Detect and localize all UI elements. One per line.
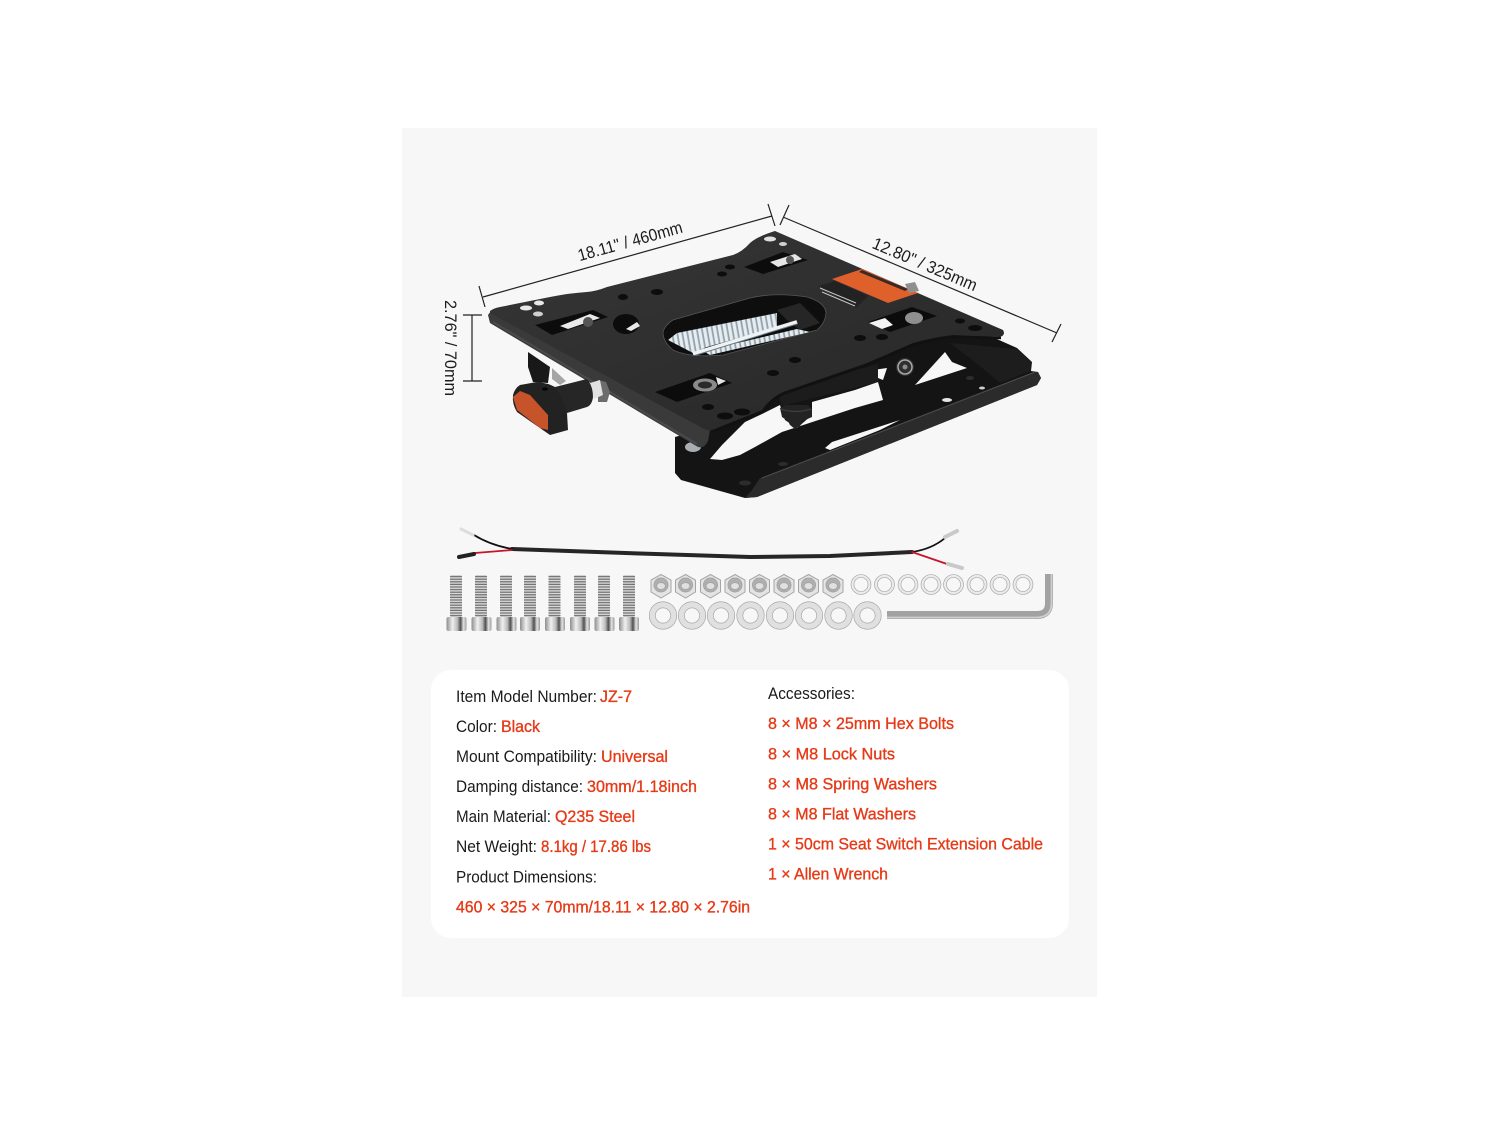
right column: accessories list: 8 × M8 × 25mm Hex Bolts	[768, 714, 954, 733]
extension cable	[459, 529, 962, 568]
spec sticker	[819, 281, 868, 308]
left column: product specs: Net Weight:	[456, 837, 537, 856]
left column: product specs: 8.1kg / 17.86 lbs	[541, 837, 651, 856]
mounting nut under plate	[780, 405, 812, 429]
product: seat suspension plate	[488, 231, 1041, 498]
hex bolts	[446, 575, 639, 631]
lock nuts	[651, 574, 843, 598]
spring washers	[852, 576, 1032, 593]
left column: product specs: JZ-7	[600, 687, 632, 706]
warning label	[832, 269, 918, 303]
top plate surface	[490, 231, 1004, 430]
left column: product specs: 460 × 325 × 70mm/18.11 × 12.80 × 2.76in	[456, 898, 750, 916]
right column: accessories list: 1 × 50cm Seat Switch Extension Cable	[768, 834, 1043, 854]
rear bolt	[905, 282, 919, 293]
left column: product specs: Damping distance:	[456, 777, 583, 796]
right column: accessories list: Accessories:	[768, 684, 855, 703]
left column: product specs: Mount Compatibility:	[456, 747, 597, 766]
dimension: depth: 12.80" / 325mm	[870, 234, 980, 295]
right column: accessories list: 8 × M8 Spring Washers	[768, 774, 937, 794]
lower base frame	[675, 330, 1041, 498]
dimension: depth	[780, 205, 1061, 342]
rectangular slots in plate	[535, 252, 937, 402]
right column: accessories list: 8 × M8 Lock Nuts	[768, 744, 895, 764]
right column: accessories list: 1 × Allen Wrench	[768, 864, 888, 884]
dimension: height: 2.76" / 70mm	[441, 300, 460, 396]
top plate side fold	[488, 311, 710, 447]
fold highlight	[493, 322, 697, 444]
left column: product specs: Main Material:	[456, 807, 551, 826]
flat washers	[652, 605, 878, 626]
specifications panel	[431, 670, 1069, 938]
left column: product specs: Q235 Steel	[555, 807, 635, 826]
central spring window	[663, 295, 826, 356]
dimension: height	[441, 300, 482, 396]
dimension: width: 18.11" / 460mm	[576, 218, 685, 265]
mounting hole	[613, 314, 639, 334]
dimension: width	[479, 204, 775, 307]
right column: accessories list: 8 × M8 Flat Washers	[768, 804, 916, 824]
left column: product specs: Black	[501, 717, 541, 736]
right column: accessories list	[768, 684, 1043, 884]
left column: product specs: Item Model Number:	[456, 687, 597, 706]
left column: product specs: Color:	[456, 717, 497, 736]
adjustment arm behind knob	[528, 352, 550, 383]
left column: product specs: Product Dimensions:	[456, 868, 597, 886]
silver bolt under arm	[552, 368, 566, 385]
adjustment knob	[513, 379, 610, 435]
hole highlight	[626, 322, 640, 331]
small plate holes	[520, 236, 982, 420]
plate underside edge	[712, 337, 1001, 432]
allen wrench	[887, 574, 1052, 618]
left column: product specs: Universal	[601, 747, 668, 766]
left column: product specs	[456, 687, 750, 916]
left column: product specs: 30mm/1.18inch	[587, 777, 697, 796]
background panel	[402, 128, 1097, 997]
infographic canvas	[445, 204, 1062, 913]
